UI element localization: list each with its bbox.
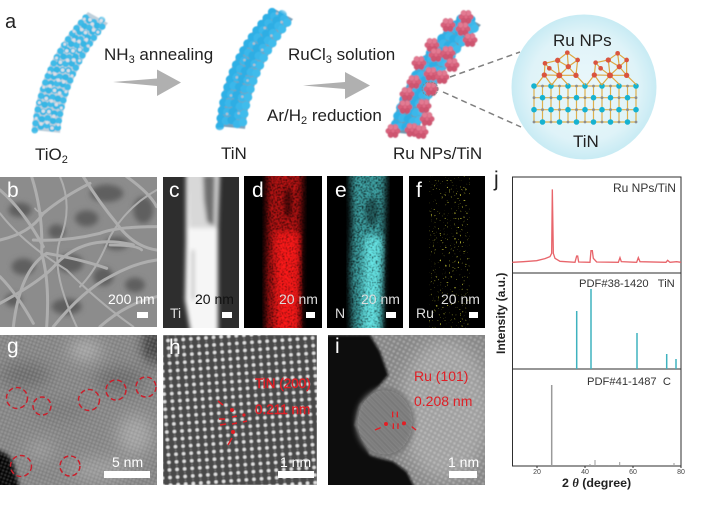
scale bar [386, 312, 396, 318]
panel g: STEM image [0, 335, 157, 485]
scale bar [222, 312, 232, 318]
label c: c [169, 179, 180, 202]
label e: e [335, 179, 347, 202]
x-axis tick labels: 40 [581, 469, 589, 476]
brightness variation [0, 325, 161, 482]
panel j: XRD chart [493, 168, 685, 490]
label N: N [335, 305, 345, 321]
panel i: Ru nanoparticle image [320, 335, 490, 492]
label: RuCl3 solution: solution [332, 45, 395, 64]
scale label: 20 nm [195, 291, 234, 307]
label: Ar/H2 reduction: Ar/H [267, 106, 301, 125]
scale label: 1 nm [280, 454, 311, 470]
label Ru: Ru [416, 305, 434, 321]
panel b: SEM image [0, 177, 157, 327]
scale bar [137, 312, 148, 318]
scale bar [469, 312, 478, 318]
scale label: 20 nm [361, 291, 400, 307]
red map: dim shell [266, 165, 303, 340]
dark gaps [5, 185, 153, 315]
icon: TiO2 nanotube [24, 0, 119, 144]
series label: TiN card: PDF#38-1420 TiN [579, 278, 675, 290]
label j: j [493, 168, 499, 191]
bright nanotube [185, 170, 220, 335]
red map: bright core [275, 232, 300, 340]
scale label: 5 nm [112, 454, 143, 470]
icon: TiN nanotube [209, 0, 303, 140]
scale label: 20 nm [441, 291, 480, 307]
x-axis tick labels: 80 [677, 469, 685, 476]
label: NH3 annealing: annealing [135, 45, 213, 64]
panel: synthesis schematic [5, 0, 656, 166]
lattice bonds [534, 86, 636, 122]
panel h: TiN lattice image [163, 335, 317, 485]
panel label a: a [5, 11, 17, 33]
scale label: 1 nm [448, 454, 479, 470]
label Ti: Ti [170, 305, 181, 321]
scale bar [449, 471, 477, 478]
y-axis title: Intensity (a.u.) [494, 273, 508, 354]
label h: h [169, 336, 181, 359]
plane label: Ru (101) [414, 368, 468, 384]
scale bar [104, 471, 150, 478]
scale label: 20 nm [279, 291, 318, 307]
series label: C card: PDF#41-1487 C [587, 376, 671, 388]
label: Ar/H2 reduction: 2 [301, 115, 307, 127]
panel c: Ti map [163, 170, 239, 335]
scale bar [306, 312, 315, 318]
axes frame [512, 177, 681, 468]
label: RuCl3 solution: RuCl [288, 45, 326, 64]
d-spacing marks [375, 412, 416, 430]
x-axis tick labels: 60 [629, 469, 637, 476]
vacuum area and particle [320, 335, 417, 492]
Ru nanoparticles on the surface [537, 50, 637, 85]
dark gap in map [365, 198, 379, 226]
panel d: red element map [244, 176, 322, 328]
dashed circles: single atoms [6, 377, 156, 476]
spacing label: 0.208 nm [414, 393, 472, 409]
yellow element map [429, 176, 470, 328]
panel f: Ru map [409, 176, 485, 328]
series label: Ru NPs/TiN: Ru NPs/TiN [613, 181, 676, 195]
inset: atomic structure circle [512, 14, 656, 160]
arrow: annealing step [113, 70, 181, 96]
TiN reference bars [577, 289, 676, 369]
cyan map: dim shell [350, 165, 386, 340]
nanofibers [0, 177, 157, 327]
dark gap in map [284, 188, 292, 218]
panel e: N map [327, 176, 403, 328]
plane label: TiN (200) [255, 376, 311, 391]
brighter support [400, 340, 490, 480]
cyan map: bright core [362, 236, 383, 340]
label i: i [335, 335, 340, 358]
label: TiN: TiN [221, 144, 247, 163]
label b: b [7, 179, 19, 202]
label: NH3 annealing: 3 [129, 54, 135, 66]
x-axis title: 2 θ (degree) [562, 476, 631, 490]
icon: Ru NPs/TiN nanotube [386, 8, 500, 139]
TiN atoms [531, 83, 639, 125]
label: TiO2: TiO [35, 145, 62, 164]
label: NH3 annealing: NH [104, 45, 129, 64]
label d: d [252, 179, 264, 202]
label: TiN in inset: TiN [573, 132, 599, 151]
arrow: reduction step [303, 72, 370, 99]
label: TiO2: 2 [62, 154, 68, 166]
x-axis tick labels [533, 469, 685, 476]
atomic lattice texture [0, 335, 157, 485]
scale label: 200 nm [108, 291, 155, 307]
label: Ar/H2 reduction: reduction [307, 106, 382, 125]
label: Ru NPs: Ru NPs [553, 31, 612, 50]
label g: g [7, 335, 19, 358]
label: RuCl3 solution: 3 [326, 54, 332, 66]
Ru NPs/TiN pattern [512, 189, 681, 262]
spacing label: 0.211 nm [255, 402, 310, 417]
nitrogen atoms [533, 85, 637, 123]
d-spacing marks [218, 401, 247, 445]
label f: f [416, 179, 422, 202]
x-axis tick labels: 20 [533, 469, 541, 476]
label: Ru NPs/TiN: Ru NPs/TiN [393, 144, 482, 163]
scale bar [278, 471, 314, 478]
graphite reference bars [552, 385, 674, 466]
lattice texture [328, 335, 485, 485]
callout lines to inset [422, 52, 521, 127]
